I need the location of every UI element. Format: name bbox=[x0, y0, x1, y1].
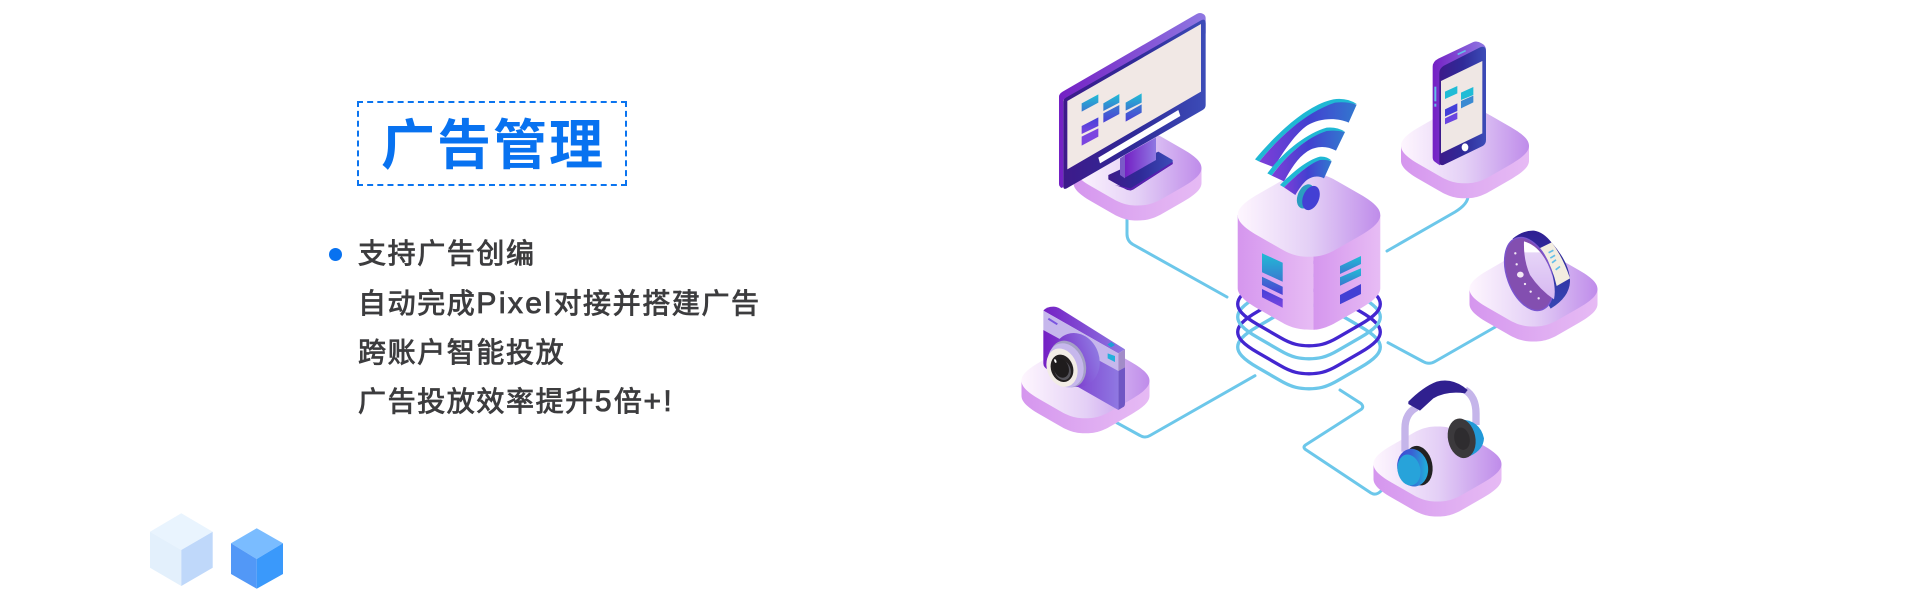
connection lines bbox=[1117, 196, 1497, 494]
rings under the hub bbox=[1238, 262, 1380, 389]
device: smart band on platform bbox=[1470, 231, 1598, 342]
platform: band bbox=[1470, 252, 1598, 342]
platform: headphones bbox=[1374, 426, 1502, 516]
hub: central box bbox=[1238, 173, 1380, 330]
camera bbox=[1041, 307, 1125, 410]
monitor bbox=[1059, 13, 1206, 191]
text block: feature list: 自动完成Pixel对接并搭建广告 bbox=[358, 287, 761, 320]
title: dashed box with heading: 广告管理 bbox=[381, 116, 605, 176]
platform: phone bbox=[1401, 108, 1529, 198]
title: dashed box with heading bbox=[357, 101, 627, 186]
device: headphones on platform bbox=[1374, 381, 1502, 516]
platform: monitor bbox=[1074, 130, 1202, 220]
device: phone on platform bbox=[1401, 42, 1529, 198]
headphones bbox=[1394, 381, 1484, 489]
text block: feature list: 广告投放效率提升5倍+! bbox=[358, 385, 674, 418]
platform: camera bbox=[1022, 343, 1150, 433]
phone bbox=[1433, 42, 1486, 165]
text block: feature list bbox=[329, 238, 761, 418]
icon: wifi bbox=[1255, 99, 1357, 213]
text block: feature list: 支持广告创编 bbox=[358, 238, 536, 269]
device: camera on platform bbox=[1022, 307, 1150, 433]
smart band bbox=[1495, 231, 1570, 317]
device: monitor on platform bbox=[1059, 13, 1206, 220]
icon: blue cube bbox=[231, 528, 283, 589]
icon: pale cube bbox=[150, 513, 213, 586]
text block: feature list: 跨账户智能投放 bbox=[358, 337, 565, 368]
